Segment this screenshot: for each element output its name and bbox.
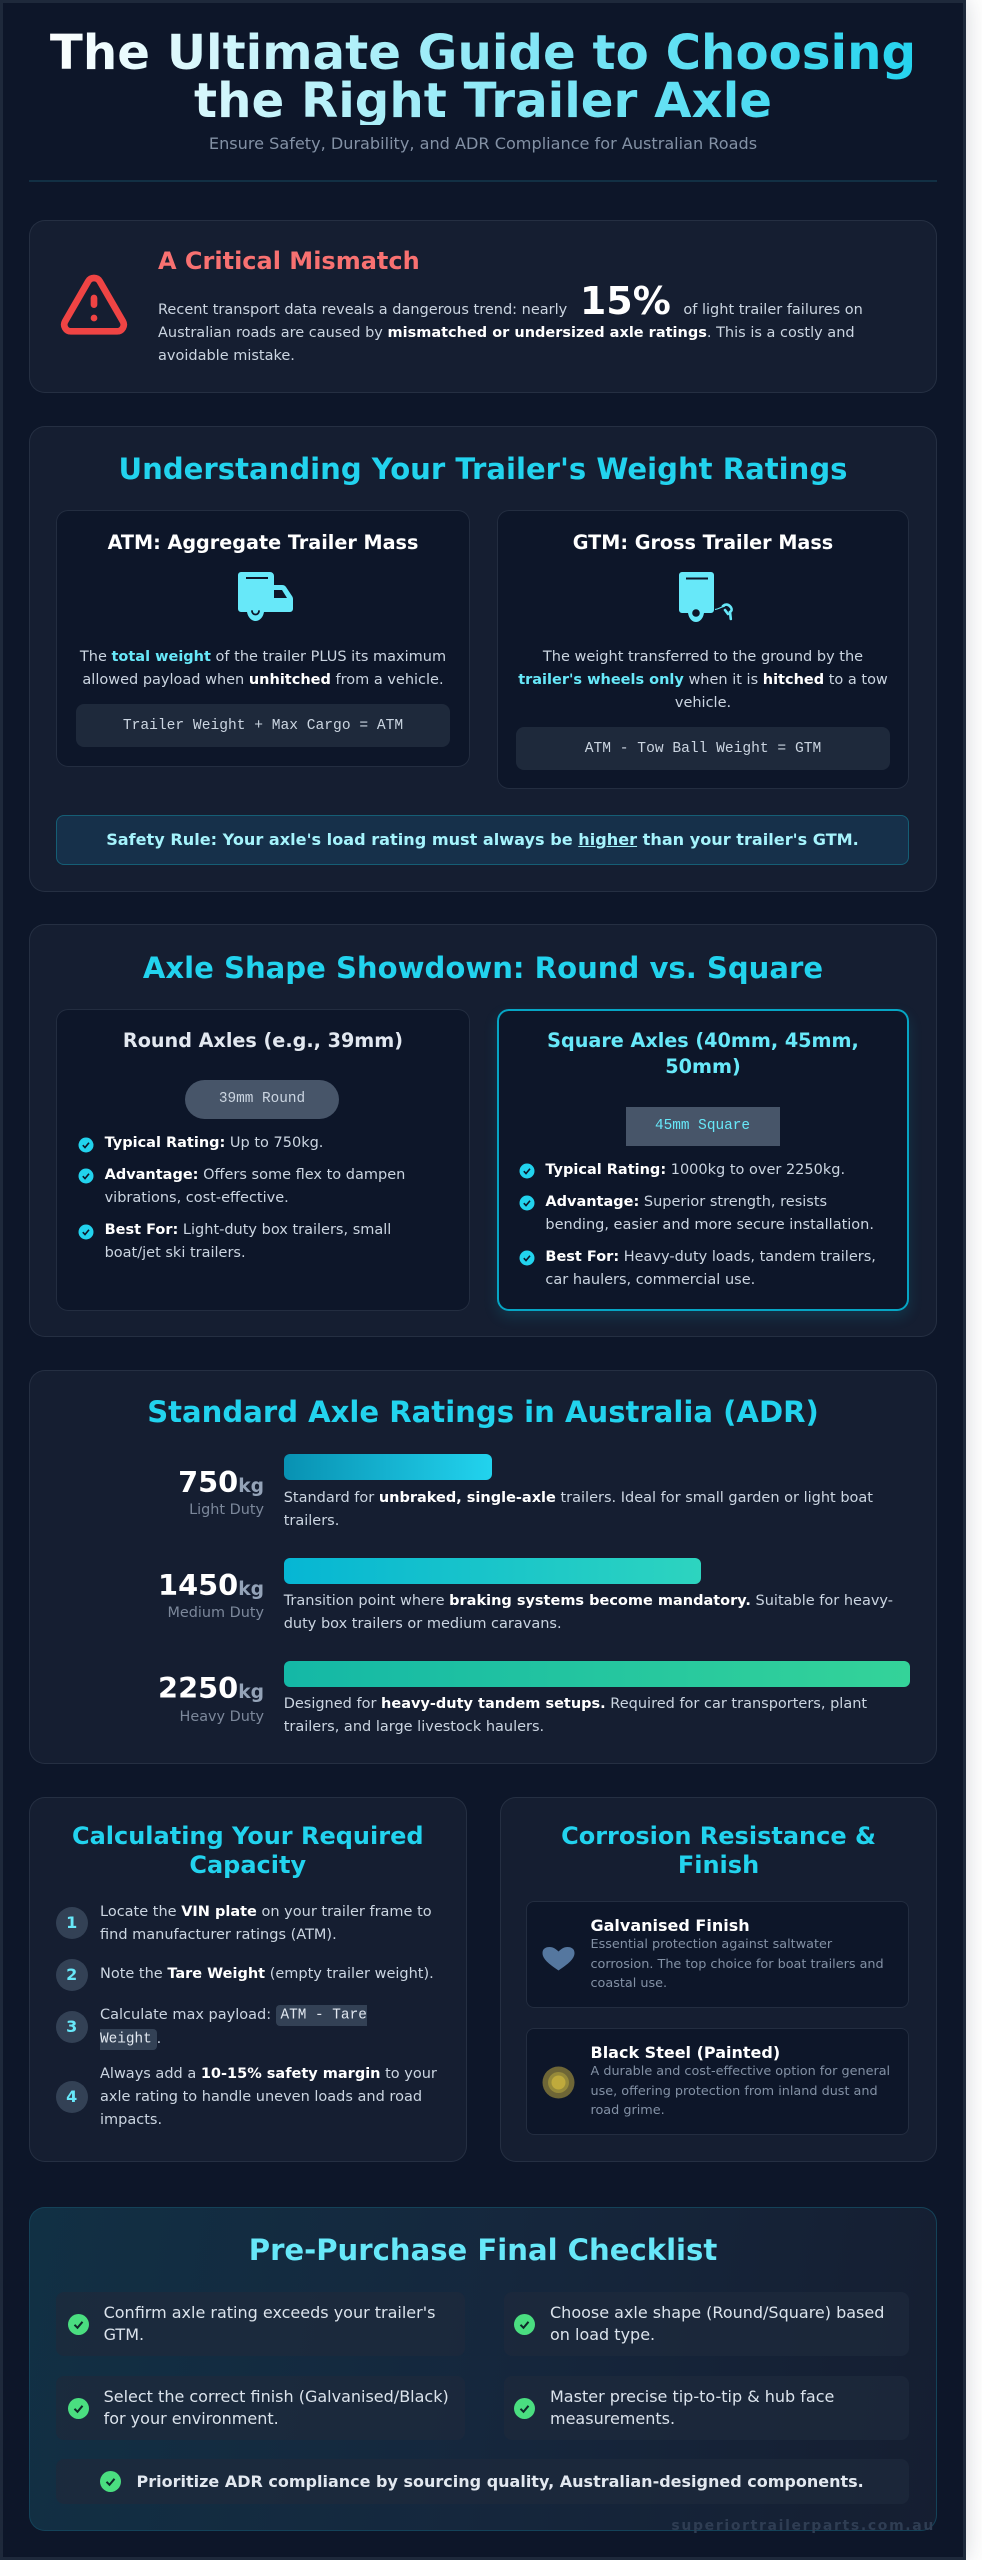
description: 750kg: Standard for unbraked, single-axle trailers. Ideal for small garden or light boat xyxy=(284,1490,873,1506)
black steel description: road grime. xyxy=(590,2103,665,2118)
heading: corrosion: Finish xyxy=(678,1851,759,1879)
item 1 text: Confirm axle rating exceeds your trailer's xyxy=(104,2302,435,2322)
black steel description: use, offering protection from inland dust and xyxy=(590,2084,878,2099)
checklist item 4 xyxy=(504,2376,909,2440)
bar: 750kg xyxy=(284,1454,492,1480)
card: galvanised finish xyxy=(526,1901,909,2008)
square title: 50mm) xyxy=(665,1055,741,1078)
advantage text: Advantage: Offers some flex to dampen xyxy=(105,1166,405,1182)
icon: check xyxy=(520,1196,534,1210)
icon: painted finish disc xyxy=(542,2066,574,2098)
galvanised description: corrosion. The top choice for boat trailers and xyxy=(590,1957,884,1972)
advantage text: vibrations, cost-effective. xyxy=(105,1190,289,1206)
icon: truck xyxy=(238,572,293,621)
heading: axle shape: Axle Shape Showdown: Round vs. Square xyxy=(143,950,823,984)
icon: check xyxy=(520,1250,534,1266)
step 3 text xyxy=(100,2005,367,2050)
item 2 text: on load type. xyxy=(550,2325,655,2344)
description: 750kg: trailers. xyxy=(284,1512,339,1528)
ATM formula xyxy=(76,704,450,747)
value: 1450kg: 1450kg xyxy=(158,1568,264,1602)
rating text: Typical Rating: Up to 750kg. xyxy=(105,1134,323,1150)
galvanised title: Galvanised Finish xyxy=(590,1916,750,1934)
item 4 text: measurements. xyxy=(550,2409,675,2428)
GTM description: vehicle. xyxy=(675,694,731,710)
step 4 text: axle rating to handle uneven loads and road xyxy=(100,2088,422,2104)
description: 2250kg xyxy=(284,1696,867,1734)
best for text: Best For: Light-duty box trailers, small xyxy=(105,1222,391,1238)
text: mismatch statistic xyxy=(158,278,863,364)
checklist item 3 xyxy=(56,2376,465,2440)
card: black steel xyxy=(526,2028,909,2135)
heading: checklist: Pre-Purchase Final Checklist xyxy=(249,2233,717,2267)
best for text: boat/jet ski trailers. xyxy=(105,1244,246,1260)
icon: check xyxy=(78,1168,94,1184)
icon: check xyxy=(520,1164,534,1178)
item 5 text: Prioritize ADR compliance by sourcing quality, Australian-designed components. xyxy=(136,2472,864,2491)
step 3 text: Calculate max payload: ATM - Tare xyxy=(100,2006,367,2024)
header xyxy=(50,25,916,153)
step 2 text: Note the Tare Weight (empty trailer weight). xyxy=(100,1966,434,1982)
GTM description: The weight transferred to the ground by the xyxy=(543,648,863,664)
item 2 text xyxy=(550,2302,884,2344)
icon: green check xyxy=(68,2314,89,2335)
round axle sample xyxy=(185,1080,339,1119)
item 1 text xyxy=(104,2302,435,2344)
checklist item 5 xyxy=(56,2459,909,2504)
panel: weight ratings xyxy=(29,426,937,892)
step 4 text: impacts. xyxy=(100,2112,162,2128)
ATM description xyxy=(80,648,446,688)
heading: weight ratings: Understanding Your Trailer's Weight Ratings xyxy=(119,452,847,486)
card: GTM xyxy=(497,510,909,789)
step 1 text: Locate the VIN plate on your trailer frame to xyxy=(100,1904,432,1920)
step 2 number xyxy=(56,1959,88,1991)
panel: axle shape showdown xyxy=(29,924,937,1337)
item 1 text: GTM. xyxy=(104,2325,144,2344)
checklist item 1 xyxy=(56,2292,465,2356)
item 2 text: Choose axle shape (Round/Square) based xyxy=(550,2302,884,2322)
title: The Ultimate Guide to Choosing xyxy=(50,25,916,81)
panel: standard axle ratings xyxy=(29,1370,937,1764)
step 4 number xyxy=(56,2081,88,2113)
description: 2250kg: Designed for heavy-duty tandem setups. Required for car transporters, plant xyxy=(284,1696,867,1712)
galvanised description xyxy=(590,1937,884,1991)
title: the Right Trailer Axle xyxy=(194,73,772,129)
step 4 text xyxy=(100,2066,437,2128)
galvanised description: coastal use. xyxy=(590,1976,667,1991)
heading: ratings: Standard Axle Ratings in Australia (ADR) xyxy=(147,1395,819,1429)
subtitle: Ensure Safety, Durability, and ADR Compliance for Australian Roads xyxy=(209,134,757,153)
icon: green check xyxy=(100,2471,121,2492)
heading: calculating: Capacity xyxy=(189,1851,306,1879)
advantage text: Advantage: Superior strength, resists xyxy=(545,1194,827,1210)
galvanised description: Essential protection against saltwater xyxy=(590,1937,832,1952)
round axle sample: 39mm Round xyxy=(219,1091,305,1107)
heading: corrosion: Corrosion Resistance & xyxy=(561,1822,876,1850)
advantage text xyxy=(104,1166,405,1206)
icon: warning triangle xyxy=(60,274,128,335)
step 4 number: 4 xyxy=(66,2087,77,2106)
heading: calculating xyxy=(72,1822,424,1879)
card: square axles xyxy=(497,1009,909,1311)
panel: corrosion resistance xyxy=(500,1797,937,2162)
callout: safety rule: Safety Rule: Your axle's load rating must always be higher than your trailer's GTM. xyxy=(106,830,859,849)
icon: green check xyxy=(514,2398,535,2418)
watermark: superiortrailerparts.com.au xyxy=(671,2518,935,2534)
black steel title: Black Steel (Painted) xyxy=(590,2042,780,2062)
GTM title: GTM: Gross Trailer Mass xyxy=(573,531,833,554)
step 4 text: Always add a 10-15% safety margin to your xyxy=(100,2066,437,2082)
step 3 number: 3 xyxy=(66,2017,77,2036)
GTM description xyxy=(518,648,888,710)
best for text xyxy=(545,1248,876,1288)
item 3 text: Select the correct finish (Galvanised/Black) xyxy=(104,2386,449,2406)
heading: a critical mismatch: A Critical Mismatch xyxy=(158,247,420,275)
title xyxy=(40,29,926,125)
step 1 text: find manufacturer ratings (ATM). xyxy=(100,1926,337,1942)
item 4 text: Master precise tip-to-tip & hub face xyxy=(550,2386,834,2406)
GTM formula: ATM - Tow Ball Weight = GTM xyxy=(585,741,821,757)
ATM title: ATM: Aggregate Trailer Mass xyxy=(108,531,418,554)
step 3 text: Weight . xyxy=(100,2030,161,2048)
icon: green check xyxy=(514,2314,535,2335)
item 4 text xyxy=(550,2386,834,2430)
item 3 text xyxy=(104,2386,449,2430)
value: 750kg: 750kg xyxy=(178,1464,264,1498)
best for text xyxy=(105,1222,391,1260)
description: 1450kg: duty box trailers or medium caravans. xyxy=(284,1616,562,1632)
square axle sample xyxy=(626,1107,780,1146)
step 1 number xyxy=(56,1907,88,1939)
advantage text: bending, easier and more secure installation. xyxy=(545,1216,874,1232)
best for text: Best For: Heavy-duty loads, tandem trailers, xyxy=(545,1248,876,1264)
description: 1450kg: Transition point where braking systems become mandatory. Suitable for heavy- xyxy=(284,1592,893,1608)
panel: final checklist xyxy=(29,2207,937,2531)
card: ATM xyxy=(56,510,470,767)
step 1 number: 1 xyxy=(66,1913,77,1932)
checklist item 2 xyxy=(504,2292,909,2356)
card: round axles xyxy=(56,1009,470,1311)
label: light duty: Light Duty xyxy=(189,1502,264,1518)
panel: calculating capacity xyxy=(29,1797,466,2162)
description: 2250kg: trailers, and large livestock haulers. xyxy=(284,1718,544,1734)
square title: Square Axles (40mm, 45mm, xyxy=(547,1029,859,1052)
round title: Round Axles (e.g., 39mm) xyxy=(123,1029,403,1052)
ATM formula: Trailer Weight + Max Cargo = ATM xyxy=(123,718,403,734)
ATM description: The total weight of the trailer PLUS its maximum xyxy=(80,648,446,664)
callout: safety rule xyxy=(56,815,909,865)
heading: calculating: Calculating Your Required xyxy=(72,1822,424,1850)
icon: trailer with hitch xyxy=(679,572,733,622)
GTM formula xyxy=(516,727,890,770)
item 3 text: for your environment. xyxy=(104,2409,279,2428)
text: mismatch statistic: Australian roads are caused by mismatched or undersized axle ratings. This is a costly and xyxy=(158,324,855,340)
rating text: Typical Rating: 1000kg to over 2250kg. xyxy=(545,1162,845,1178)
label: heavy duty: Heavy Duty xyxy=(180,1709,264,1725)
icon: check xyxy=(78,1138,94,1152)
advantage text xyxy=(545,1194,874,1232)
bar: 2250kg xyxy=(284,1661,910,1687)
icon: blue heart xyxy=(542,1947,574,1970)
text: mismatch statistic: avoidable mistake. xyxy=(158,348,295,364)
ATM description: allowed payload when unhitched from a vehicle. xyxy=(82,672,444,688)
step 2 number: 2 xyxy=(66,1965,77,1984)
icon: check xyxy=(78,1224,94,1240)
text: mismatch statistic: Recent transport data reveals a dangerous trend: nearly 15% of light trailer failures on xyxy=(158,278,863,322)
square axle sample: 45mm Square xyxy=(655,1118,750,1134)
description: 1450kg xyxy=(284,1592,893,1632)
bar: 1450kg xyxy=(284,1558,701,1584)
black steel description: A durable and cost-effective option for general xyxy=(590,2064,890,2079)
description: 750kg xyxy=(284,1490,873,1528)
value: 2250kg: 2250kg xyxy=(158,1671,264,1705)
black steel description xyxy=(590,2064,890,2118)
step 1 text xyxy=(100,1904,432,1942)
label: medium duty: Medium Duty xyxy=(168,1605,264,1621)
step 3 number xyxy=(56,2011,88,2043)
panel: critical mismatch xyxy=(29,220,937,393)
GTM description: trailer's wheels only when it is hitched to a tow xyxy=(518,672,888,688)
icon: green check xyxy=(68,2398,89,2418)
square title xyxy=(547,1029,859,1078)
best for text: car haulers, commercial use. xyxy=(545,1272,755,1288)
heading: corrosion xyxy=(561,1822,876,1879)
